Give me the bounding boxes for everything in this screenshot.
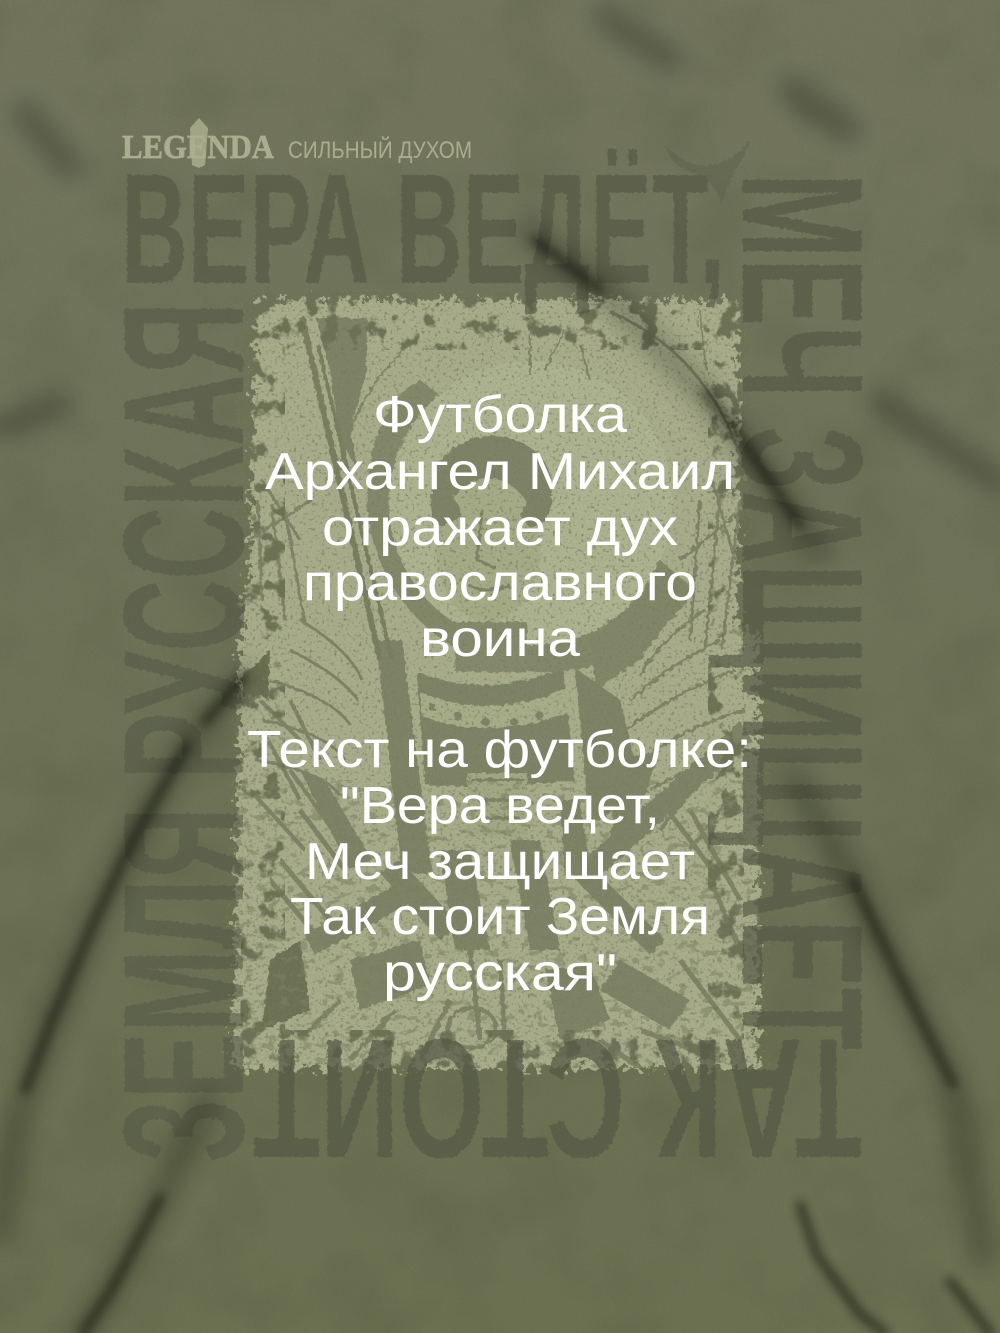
logo ornament [190, 118, 208, 168]
text block: description overlay: Текст на футболке: [247, 721, 752, 779]
text block: description overlay: Так стоит Земля [290, 888, 710, 946]
text block: description overlay: православного [303, 554, 697, 612]
icon: armour bib and collar [417, 668, 640, 837]
text block: description overlay: "Вера ведет, [340, 777, 660, 835]
text block: description overlay: отражает дух [322, 499, 678, 557]
logo tagline: СИЛЬНЫЙ ДУХОМ [288, 136, 472, 164]
icon: halo [340, 310, 745, 672]
logo wordmark: LEGENDA [122, 129, 274, 166]
text block: description overlay: воина [420, 610, 580, 668]
icon: right wing [590, 480, 750, 850]
icon: head of the archangel [430, 436, 552, 672]
distressed panel edges [225, 285, 775, 1070]
icon: left wing [240, 480, 362, 850]
panel: archangel artwork [225, 285, 775, 1075]
lower artwork texture [236, 780, 760, 1068]
icon: sword [302, 317, 432, 873]
text block: description overlay: Футболка [373, 386, 627, 444]
text block: description overlay: Архангел Михаил [265, 443, 735, 501]
brand logo [122, 118, 472, 168]
text block: description overlay: русская" [383, 944, 617, 1002]
text block: description overlay [247, 386, 752, 1002]
text block: description overlay: Меч защищает [305, 833, 695, 891]
ornament above slogan [665, 140, 750, 205]
icon: robes and cross [262, 722, 752, 1068]
